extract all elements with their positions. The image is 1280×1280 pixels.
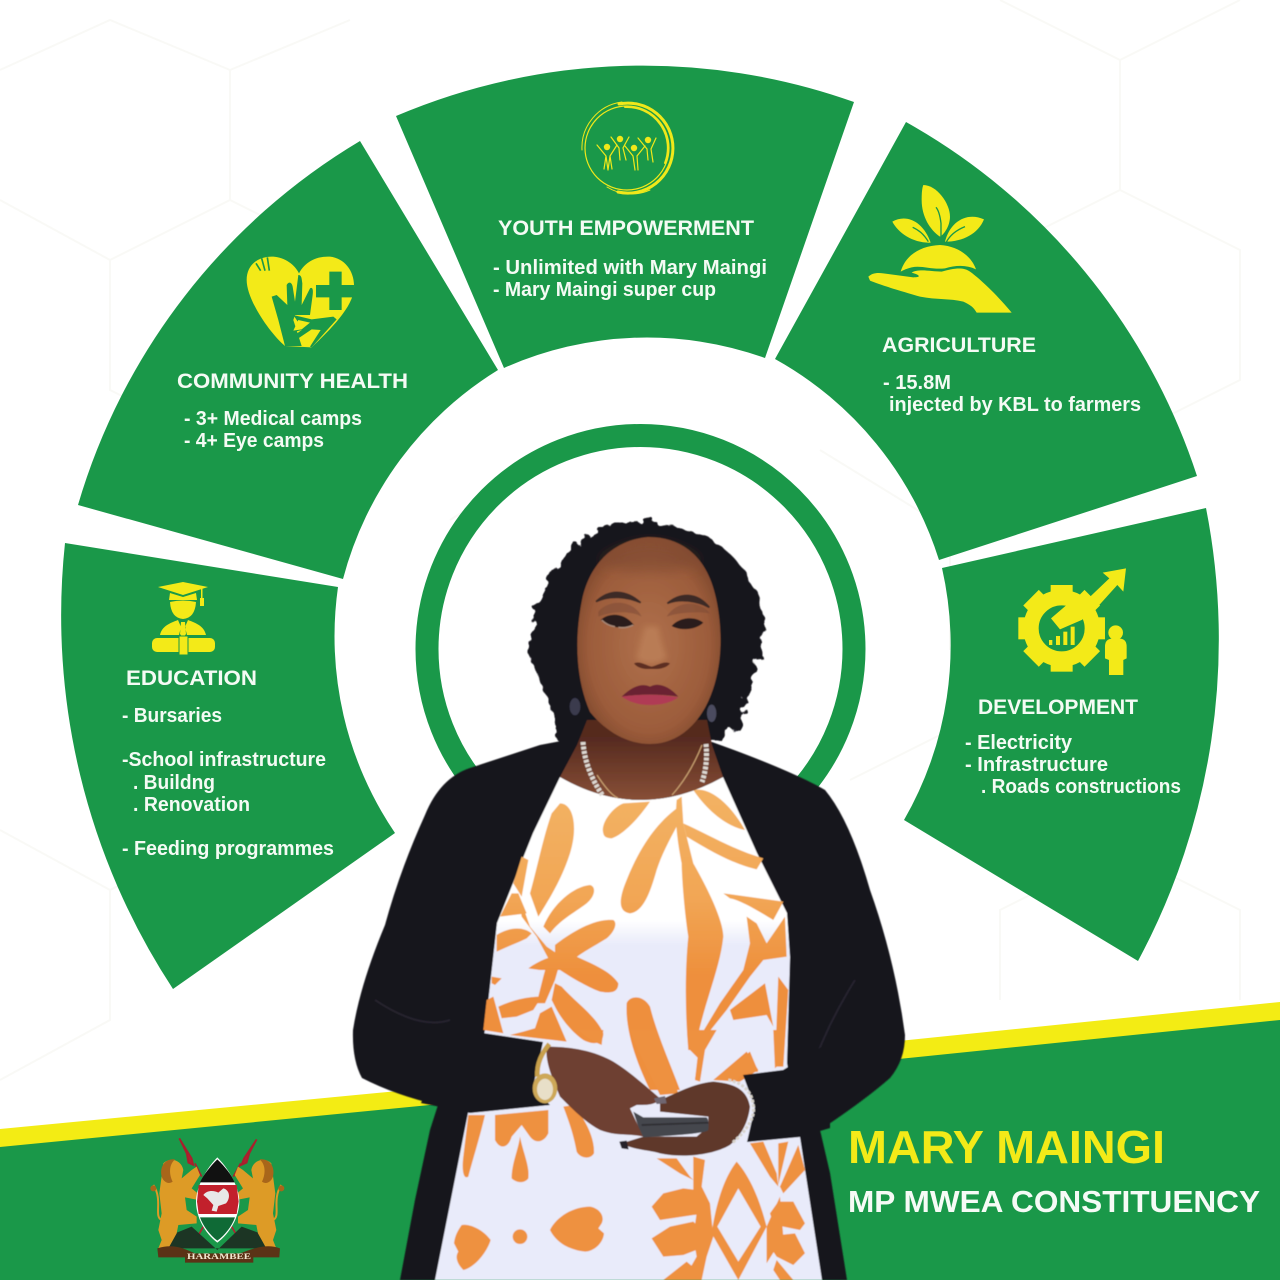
heading: education: EDUCATION — [126, 667, 257, 690]
earrings — [570, 698, 580, 715]
sector: youth empowerment — [396, 66, 854, 368]
dress print lower — [454, 1030, 805, 1280]
cardigan — [353, 738, 905, 1280]
role: MP Mwea Constituency: MP MWEA CONSTITUENCY — [848, 1184, 1260, 1219]
sector: development — [904, 508, 1219, 961]
bracelet — [728, 1080, 754, 1143]
nose highlight — [637, 627, 667, 663]
text: agriculture items — [883, 372, 1141, 416]
text: youth empowerment items — [493, 257, 767, 301]
right hand — [622, 1082, 750, 1156]
text: community health items: - 4+ Eye camps — [184, 430, 324, 452]
left sleeve — [421, 1033, 550, 1113]
text: education items: . Renovation — [133, 794, 250, 816]
central green ring — [427, 436, 854, 862]
text: education items: . Buildng — [133, 772, 215, 794]
right sleeve — [743, 1042, 830, 1142]
icon: gear with arrow — [1018, 568, 1127, 675]
icon: heart with hands — [247, 257, 354, 347]
text: youth empowerment items: - Unlimited with Mary Maingi — [493, 257, 767, 279]
heading: youth empowerment: YOUTH EMPOWERMENT — [498, 217, 754, 240]
watch — [537, 1044, 549, 1077]
text: development items: - Electricity — [965, 732, 1073, 754]
text: education items: - Feeding programmes — [122, 838, 334, 860]
text: youth empowerment items: - Mary Maingi super cup — [493, 279, 716, 301]
text: education items — [122, 705, 334, 860]
text: education items: -School infrastructure — [122, 749, 326, 771]
heading: community health: COMMUNITY HEALTH — [177, 370, 408, 393]
phone — [633, 1112, 709, 1137]
icon: youth circle — [582, 102, 673, 194]
panel: community health — [78, 141, 498, 579]
text: development items — [965, 732, 1181, 798]
bottom band — [0, 1002, 1280, 1280]
person portrait — [353, 521, 905, 1280]
panel: youth empowerment — [396, 66, 854, 368]
icon: graduate — [152, 582, 215, 655]
nostrils — [634, 662, 670, 669]
cardigan fold lines — [375, 980, 855, 1060]
nails — [654, 1096, 667, 1104]
dress print upper — [483, 790, 788, 1090]
text: agriculture items: - 15.8M — [883, 372, 951, 394]
panel: education — [61, 543, 395, 989]
icon: hand with plant — [868, 185, 1012, 313]
name: Mary Maingi: MARY MAINGI — [848, 1121, 1165, 1173]
text: development items: - Infrastructure — [965, 754, 1108, 776]
sector: education — [61, 543, 395, 989]
panel: development — [904, 508, 1219, 961]
text: community health items: - 3+ Medical camps — [184, 408, 362, 430]
motto: Harambee: HARAMBEE — [187, 1251, 251, 1261]
eye shadow — [598, 603, 710, 617]
heading: development: DEVELOPMENT — [978, 696, 1138, 719]
forehead shadow — [600, 542, 700, 571]
panel: agriculture — [775, 122, 1197, 560]
eyebrows — [596, 592, 709, 607]
face — [577, 537, 721, 744]
text: agriculture items: injected by KBL to farmers — [889, 394, 1141, 416]
text: community health items — [184, 408, 362, 452]
hands and phone — [533, 1044, 754, 1156]
text: development items: . Roads constructions — [981, 776, 1181, 798]
neck — [560, 720, 723, 800]
dress — [435, 777, 822, 1280]
facial features — [570, 592, 716, 722]
sector: agriculture — [775, 122, 1197, 560]
heading: agriculture: AGRICULTURE — [882, 334, 1036, 357]
coat of arms — [150, 1138, 284, 1263]
hair — [530, 521, 764, 742]
eyes — [601, 615, 703, 629]
sector: community health — [78, 141, 498, 579]
lips — [622, 685, 678, 697]
left hand — [546, 1047, 660, 1137]
necklace — [583, 742, 706, 798]
text: education items: - Bursaries — [122, 705, 222, 727]
